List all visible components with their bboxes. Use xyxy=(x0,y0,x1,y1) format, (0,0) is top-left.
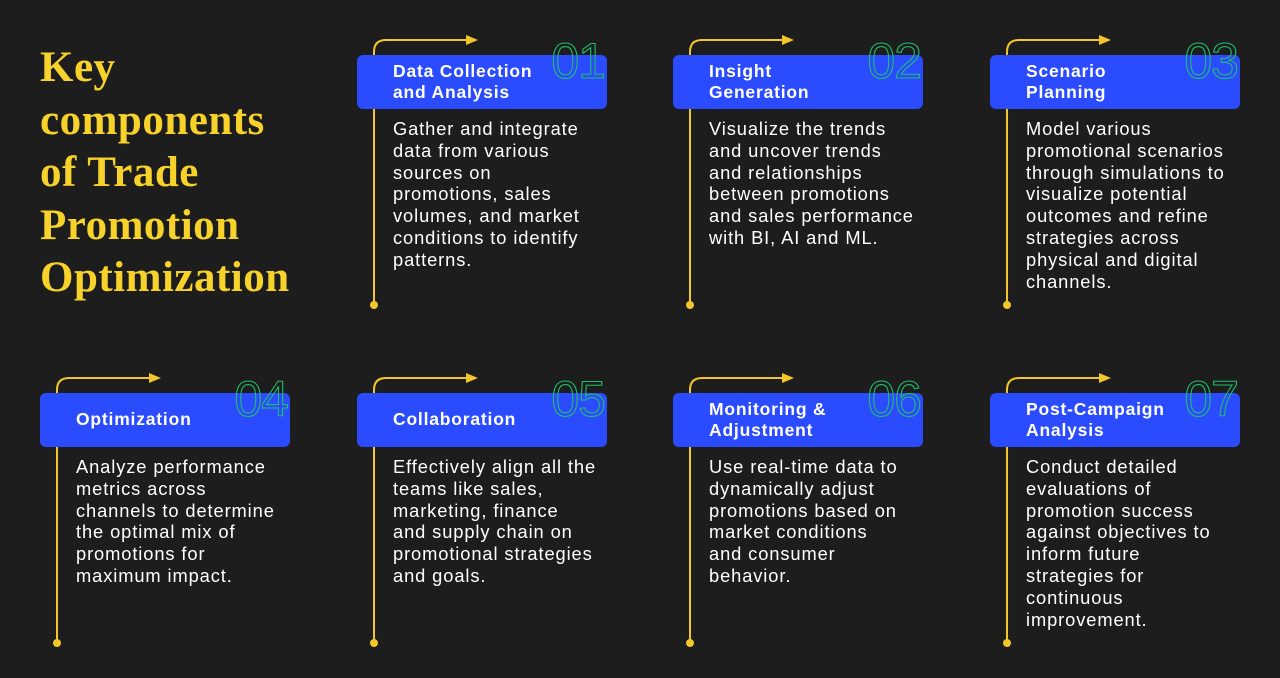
heading bar: Planning xyxy=(1026,82,1106,102)
text: strategies across xyxy=(1026,227,1179,248)
text: promotional strategies xyxy=(393,543,593,564)
arrow line xyxy=(1003,373,1111,647)
text xyxy=(1026,118,1225,292)
text: Visualize the trends xyxy=(709,118,886,139)
text: Analyze performance xyxy=(76,456,266,477)
text: maximum impact. xyxy=(76,565,233,586)
card 04 xyxy=(40,373,290,647)
text: behavior. xyxy=(709,565,791,586)
text: promotional scenarios xyxy=(1026,140,1224,161)
heading bar: Insight xyxy=(709,60,772,80)
text: Conduct detailed xyxy=(1026,456,1178,477)
text: and supply chain on xyxy=(393,521,573,542)
text: and relationships xyxy=(709,162,863,183)
text: Model various xyxy=(1026,118,1152,139)
text: dynamically adjust xyxy=(709,478,875,499)
heading bar: Monitoring & xyxy=(709,398,826,418)
text: continuous xyxy=(1026,587,1123,608)
heading bar xyxy=(990,55,1240,109)
text: channels to determine xyxy=(76,500,275,521)
text: volumes, and market xyxy=(393,205,580,226)
text: Gather and integrate xyxy=(393,118,579,139)
text xyxy=(76,456,275,586)
text: improvement. xyxy=(1026,609,1148,630)
arrow line xyxy=(686,373,794,647)
text xyxy=(1026,456,1211,630)
text xyxy=(393,118,580,270)
text xyxy=(393,456,596,586)
title: components xyxy=(40,96,265,144)
heading bar xyxy=(357,393,607,447)
text: promotions based on xyxy=(709,500,897,521)
text: promotions for xyxy=(76,543,205,564)
title: of Trade xyxy=(40,149,199,196)
text: metrics across xyxy=(76,478,206,499)
text: physical and digital xyxy=(1026,249,1198,270)
text: and uncover trends xyxy=(709,140,882,161)
arrow line xyxy=(370,35,478,309)
arrow line xyxy=(370,373,478,647)
title: Key xyxy=(40,44,116,91)
title: Optimization xyxy=(40,254,290,301)
text: conditions to identify xyxy=(393,227,578,248)
text: strategies for xyxy=(1026,565,1144,586)
card 02 xyxy=(673,35,923,309)
text: through simulations to xyxy=(1026,162,1225,183)
card 05 xyxy=(357,373,607,647)
heading bar xyxy=(357,55,607,109)
heading bar xyxy=(673,55,923,109)
text: against objectives to xyxy=(1026,521,1211,542)
heading bar xyxy=(40,393,290,447)
heading bar xyxy=(990,393,1240,447)
heading bar: Data Collection xyxy=(393,60,532,80)
text: visualize potential xyxy=(1026,183,1187,204)
card 03 xyxy=(990,35,1240,309)
heading bar: Scenario xyxy=(1026,60,1106,80)
heading bar: Optimization xyxy=(76,409,192,429)
card 06 xyxy=(673,373,923,647)
text xyxy=(709,118,914,248)
text: the optimal mix of xyxy=(76,521,235,542)
text: and goals. xyxy=(393,565,486,586)
heading bar: Generation xyxy=(709,82,809,102)
heading bar: and Analysis xyxy=(393,82,510,102)
heading bar xyxy=(673,393,923,447)
heading bar: Analysis xyxy=(1026,420,1104,440)
text: and consumer xyxy=(709,543,836,564)
text: data from various xyxy=(393,140,550,161)
text: and sales performance xyxy=(709,205,914,226)
card 01 xyxy=(357,35,607,309)
arrow line xyxy=(686,35,794,309)
title: Promotion xyxy=(40,202,240,248)
text: market conditions xyxy=(709,521,868,542)
text: Use real-time data to xyxy=(709,456,898,477)
text: teams like sales, xyxy=(393,478,543,499)
text: between promotions xyxy=(709,183,890,204)
card 07 xyxy=(990,373,1240,647)
title xyxy=(40,44,290,301)
heading bar: Adjustment xyxy=(709,420,813,440)
arrow line xyxy=(1003,35,1111,309)
text: promotions, sales xyxy=(393,183,552,204)
text: promotion success xyxy=(1026,500,1194,521)
text: inform future xyxy=(1026,543,1140,564)
text: outcomes and refine xyxy=(1026,205,1209,226)
text: marketing, finance xyxy=(393,500,559,521)
text: channels. xyxy=(1026,271,1112,292)
heading bar: Post-Campaign xyxy=(1026,398,1165,418)
text: with BI, AI and ML. xyxy=(709,227,879,248)
text: evaluations of xyxy=(1026,478,1151,499)
arrow line xyxy=(53,373,161,647)
heading bar: Collaboration xyxy=(393,409,516,429)
text: sources on xyxy=(393,162,491,183)
text: Effectively align all the xyxy=(393,456,596,477)
text: patterns. xyxy=(393,249,472,270)
text xyxy=(709,456,898,586)
